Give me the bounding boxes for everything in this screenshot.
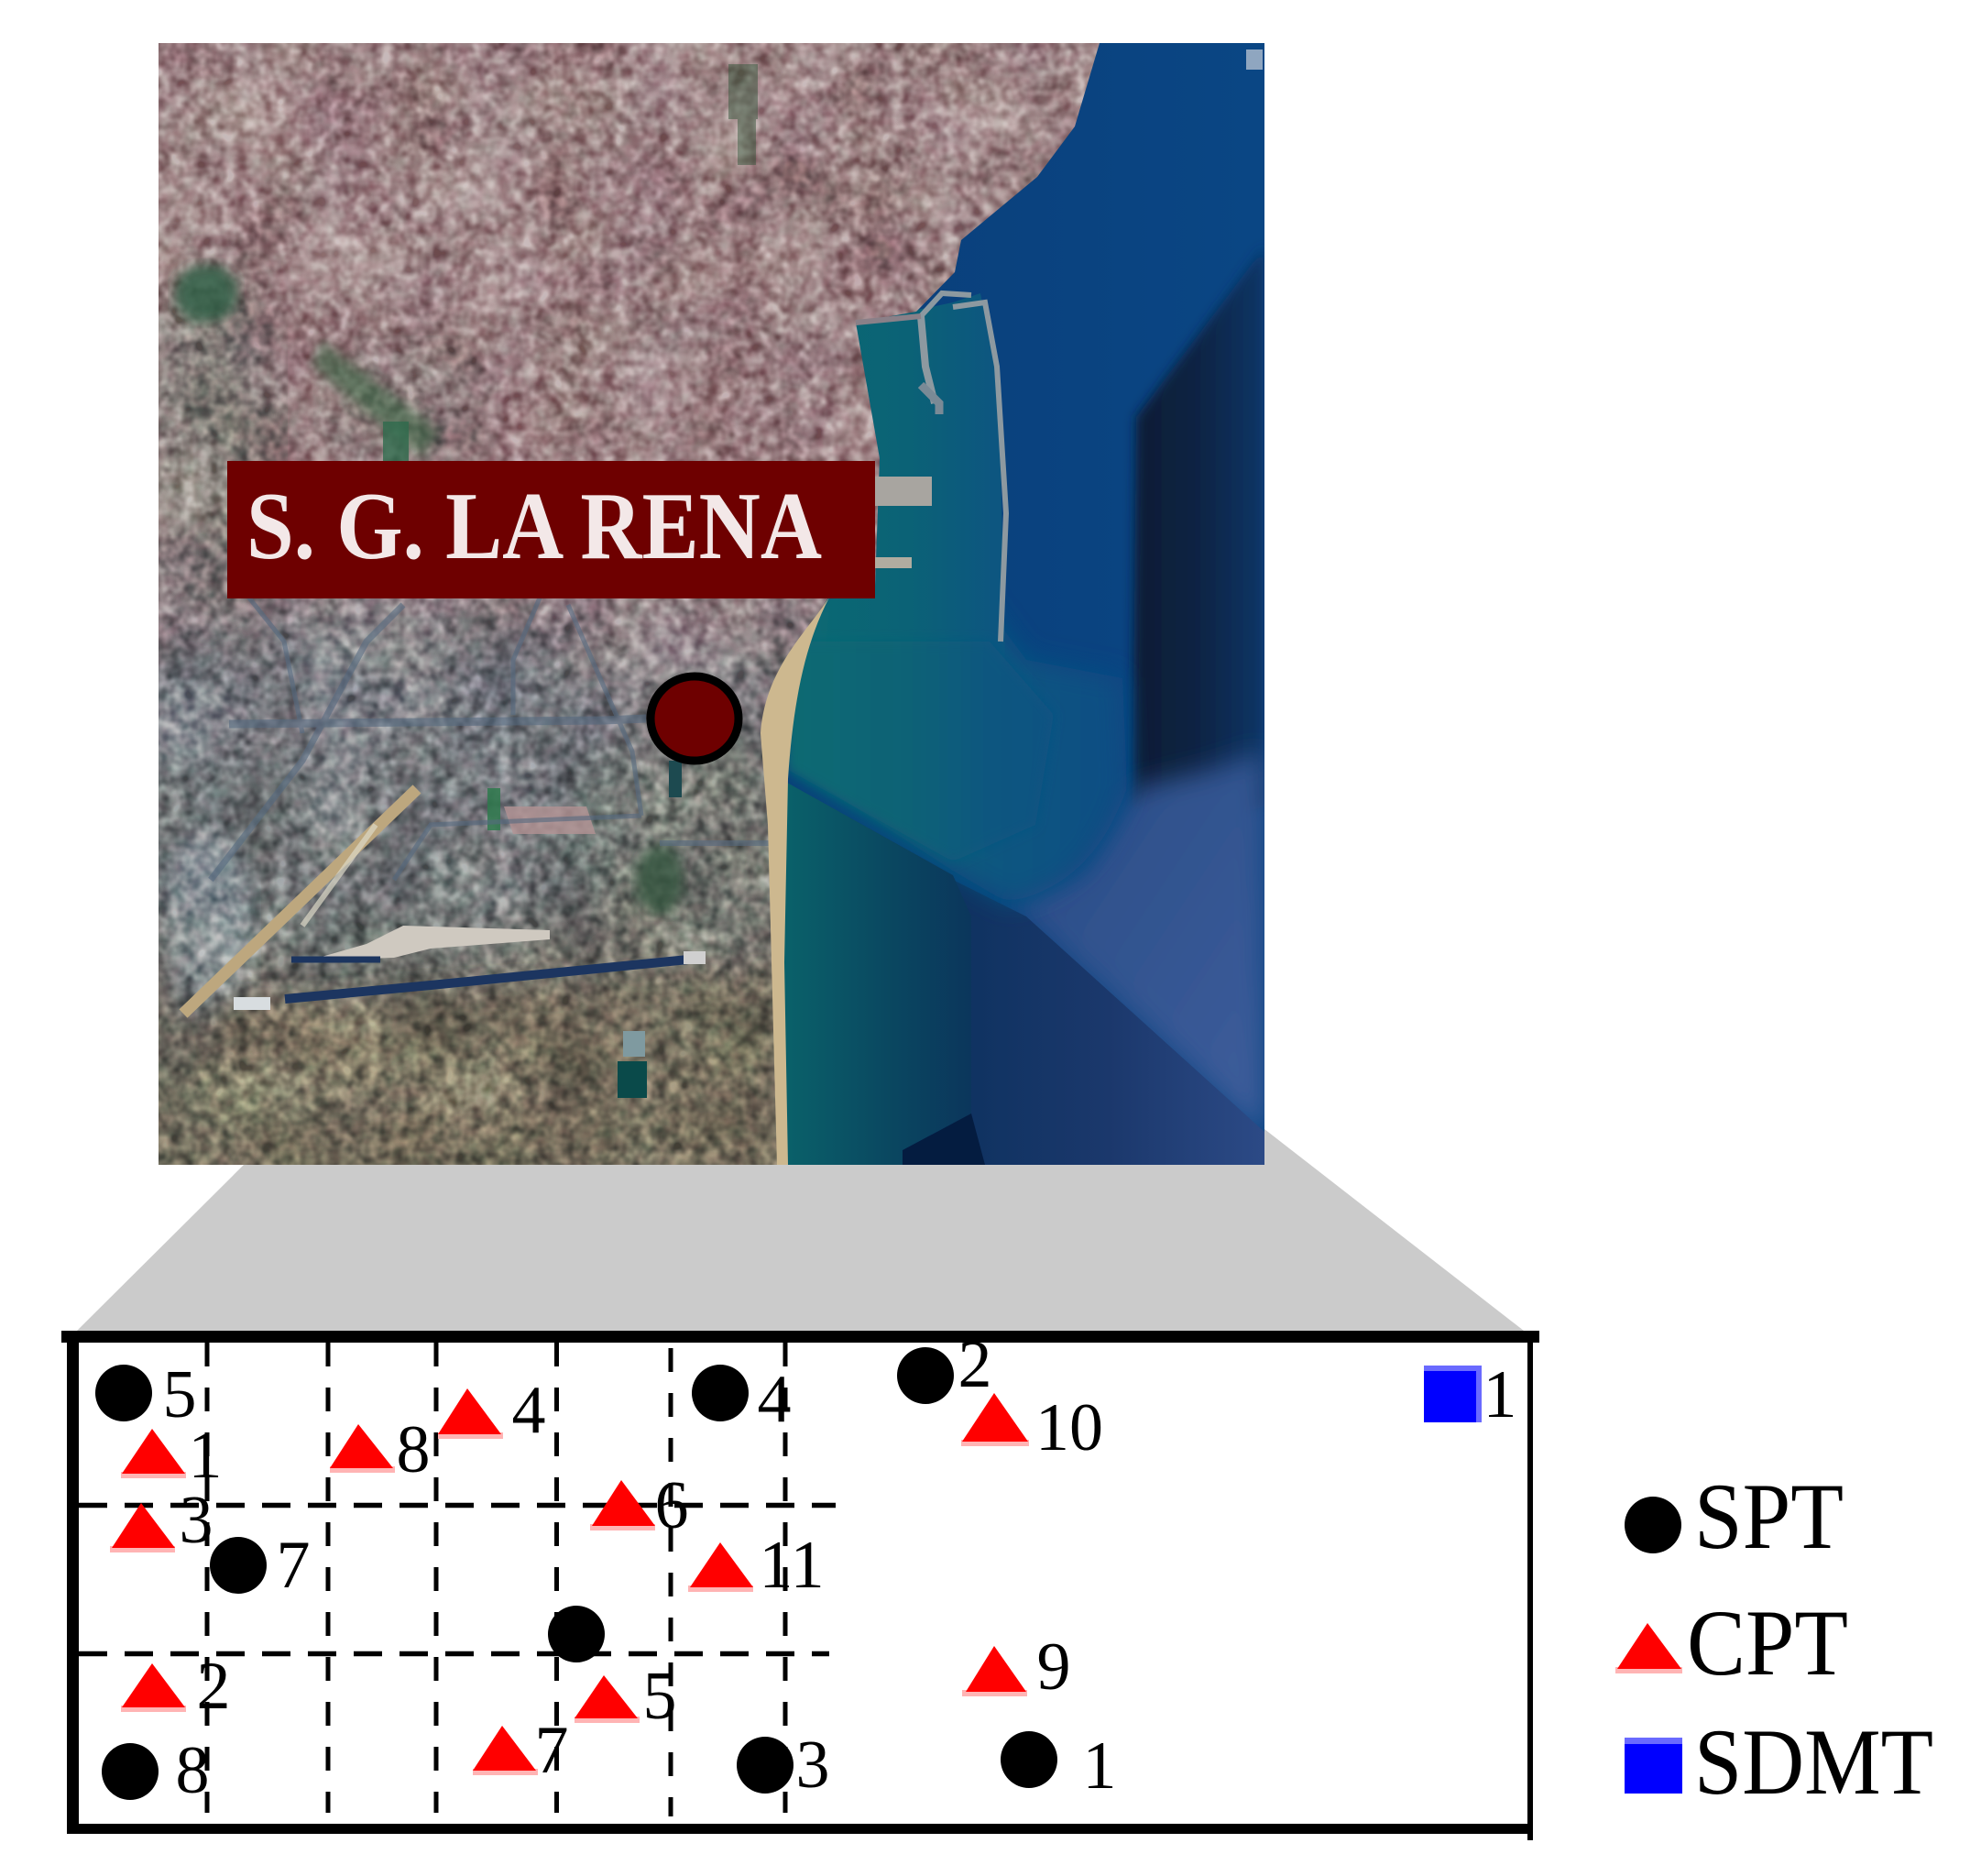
point number labels: 2 — [958, 1327, 991, 1402]
plan: frame — [61, 1331, 1539, 1840]
site plan panel — [61, 1327, 1539, 1840]
point number labels: 7 — [277, 1528, 310, 1603]
point number labels: 7 — [535, 1713, 568, 1788]
point number labels: 4 — [511, 1373, 546, 1448]
point number labels — [163, 1327, 1517, 1808]
legend: SPT: SPT — [1694, 1465, 1844, 1569]
SDMT point — [1424, 1366, 1482, 1422]
map: harbour water — [856, 293, 1004, 634]
map: green patches — [174, 264, 238, 323]
map: navy triangle — [953, 880, 1264, 1165]
point number labels: 1 — [189, 1418, 222, 1493]
point number labels: 11 — [759, 1528, 825, 1603]
map: shallow teal bay — [788, 587, 1127, 903]
legend — [1615, 1465, 1933, 1815]
legend: SDMT: SDMT — [1694, 1710, 1933, 1815]
legend: SPT — [1625, 1465, 1844, 1569]
zoom connector: grey trapezoid — [77, 1129, 1524, 1331]
point number labels: 1 — [1083, 1728, 1116, 1804]
map: harbour breakwaters — [856, 293, 1006, 642]
CPT points — [110, 1388, 1029, 1775]
map: dark notch — [903, 1114, 985, 1165]
map: bay body fill — [788, 668, 901, 828]
map: airport tan runway — [183, 789, 417, 1014]
map: beach strip — [761, 598, 829, 1165]
site label: S. G. LA RENA: S. G. LA RENA — [246, 472, 822, 579]
plan: background — [73, 1338, 1530, 1828]
map: airport apron — [323, 926, 550, 959]
map: grey-blue urban belt — [159, 609, 586, 969]
map: dark offshore panel — [1133, 247, 1264, 825]
point number labels: 3 — [180, 1483, 213, 1558]
point number labels: 5 — [163, 1357, 196, 1432]
map: airport dark runway — [285, 959, 697, 999]
map: teal band at foot of beach — [781, 779, 971, 1165]
point number labels: 5 — [643, 1659, 676, 1734]
point number labels: 6 — [654, 1468, 689, 1543]
site location marker — [651, 676, 739, 761]
map: pink block — [504, 806, 596, 834]
legend: CPT: CPT — [1687, 1591, 1848, 1695]
legend: CPT — [1615, 1591, 1848, 1695]
map: lower right blue water — [1008, 751, 1264, 1136]
point number labels: 10 — [1035, 1390, 1103, 1465]
SPT points — [95, 1347, 1057, 1800]
point number labels: 8 — [396, 1412, 431, 1487]
point number labels: 3 — [795, 1728, 830, 1803]
map: harbour pier — [875, 477, 932, 506]
point number labels: 4 — [757, 1362, 792, 1437]
map: road network — [211, 596, 770, 880]
map: texture — [159, 43, 1100, 1165]
satellite map — [92, 43, 1264, 1165]
map: bottom brown fields — [211, 971, 773, 1131]
point number labels: 8 — [176, 1733, 209, 1808]
map: land — [159, 43, 1100, 1165]
point number labels: 2 — [196, 1649, 231, 1724]
point number labels: 1 — [1483, 1357, 1517, 1432]
plan: dashed grid — [79, 1343, 836, 1816]
map: pond — [618, 1061, 647, 1098]
map: sea base — [788, 43, 1264, 1150]
point number labels: 9 — [1037, 1629, 1070, 1705]
map: corner speck — [1246, 49, 1263, 70]
